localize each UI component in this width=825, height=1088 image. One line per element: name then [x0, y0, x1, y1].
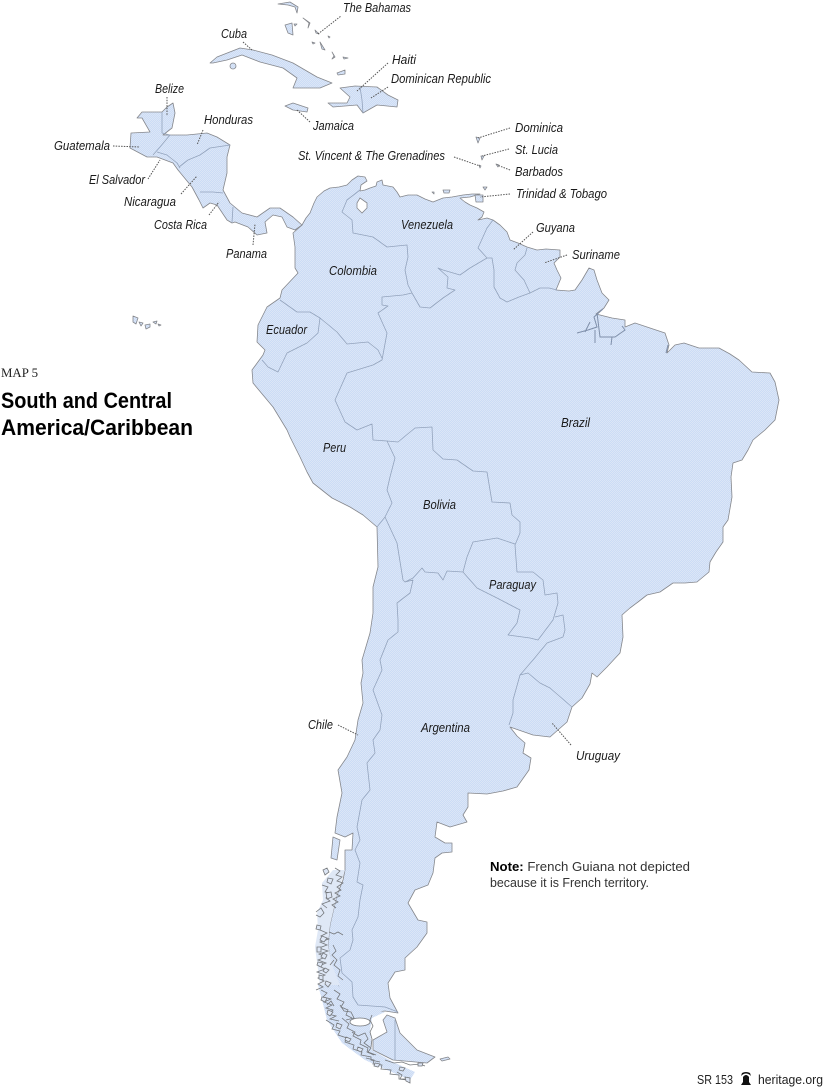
- label: Uruguay: Uruguay: [576, 749, 621, 763]
- label: Dominica: Dominica: [515, 121, 563, 135]
- label: Honduras: [197, 113, 253, 145]
- label: Suriname: [544, 248, 620, 263]
- label: Uruguay: [552, 723, 621, 763]
- label: Nicaragua: [124, 176, 197, 209]
- land: southern Chile islands and fjords: [315, 837, 450, 1083]
- label: Costa Rica: Costa Rica: [154, 218, 207, 232]
- label: Cuba: [221, 27, 252, 50]
- label: Costa Rica: [154, 202, 219, 232]
- label: Ecuador: Ecuador: [266, 323, 308, 337]
- label: St. Lucia: St. Lucia: [515, 143, 558, 157]
- label: Haiti: [357, 53, 417, 91]
- lake: Maracaibo: [357, 198, 367, 213]
- label: El Salvador: [89, 160, 160, 187]
- title: America/Caribbean: [1, 415, 193, 440]
- label: El Salvador: El Salvador: [89, 173, 146, 187]
- label: Jamaica: Jamaica: [312, 119, 354, 133]
- label: St. Vincent & The Grenadines: St. Vincent & The Grenadines: [298, 149, 445, 163]
- label: Guatemala: Guatemala: [54, 139, 110, 153]
- label: Panama: Panama: [226, 247, 267, 261]
- footer: report number: SR 153: [697, 1072, 733, 1087]
- islands: The Bahamas and Turks: [278, 2, 348, 75]
- title: South and Central: [1, 388, 172, 413]
- map: South and Central America and Caribbean: [130, 2, 779, 1083]
- river: Amazon delta: [577, 309, 668, 353]
- label: The Bahamas: [318, 1, 411, 34]
- label: Honduras: Honduras: [204, 113, 253, 127]
- islands: Hispaniola: [328, 86, 398, 113]
- borders: Central America: [153, 112, 233, 222]
- note: Note: French Guiana not depicted: [490, 860, 681, 874]
- label: Dominica: [478, 121, 563, 138]
- note: because it is French territory.: [490, 876, 649, 890]
- label: Venezuela: Venezuela: [401, 218, 453, 232]
- label: Barbados: Barbados: [515, 165, 563, 179]
- label: Panama: [226, 224, 267, 261]
- land: Central America: [130, 103, 302, 235]
- label: Argentina: Argentina: [420, 721, 470, 735]
- label: Dominican Republic: [371, 72, 492, 98]
- label: Trinidad & Tobago: Trinidad & Tobago: [516, 187, 607, 201]
- label: Guyana: [513, 221, 575, 250]
- label: Paraguay: Paraguay: [489, 578, 537, 592]
- label: Brazil: Brazil: [561, 416, 591, 430]
- islands: Lesser Antilles: [432, 137, 499, 202]
- label: Trinidad & Tobago: [480, 187, 607, 201]
- label: Haiti: Haiti: [392, 53, 417, 67]
- land: South America mainland: [252, 176, 779, 1013]
- label: Jamaica: [297, 110, 354, 133]
- borders: South American countries: [262, 190, 572, 1060]
- label: The Bahamas: The Bahamas: [343, 1, 411, 15]
- label: Colombia: Colombia: [329, 264, 377, 278]
- label: Belize: Belize: [155, 82, 184, 96]
- islands: Cuba: [210, 48, 332, 88]
- icon: liberty bell: [741, 1072, 751, 1085]
- label: Chile: [308, 718, 358, 735]
- land: Tierra del Fuego: [373, 1015, 435, 1063]
- island: Jamaica: [285, 103, 308, 112]
- label: Cuba: Cuba: [221, 27, 247, 41]
- label: Belize: [155, 82, 184, 116]
- islands: Galapagos: [133, 316, 161, 329]
- label: Nicaragua: Nicaragua: [124, 195, 176, 209]
- label: Suriname: Suriname: [572, 248, 620, 262]
- label: Bolivia: Bolivia: [423, 498, 456, 512]
- map number: MAP 5: [1, 365, 38, 380]
- label: Chile: Chile: [308, 718, 333, 732]
- label: Dominican Republic: Dominican Republic: [391, 72, 492, 86]
- label: Barbados: [497, 165, 563, 179]
- label: Peru: Peru: [323, 441, 346, 455]
- label: Guyana: Guyana: [536, 221, 575, 235]
- label: St. Lucia: [482, 143, 558, 157]
